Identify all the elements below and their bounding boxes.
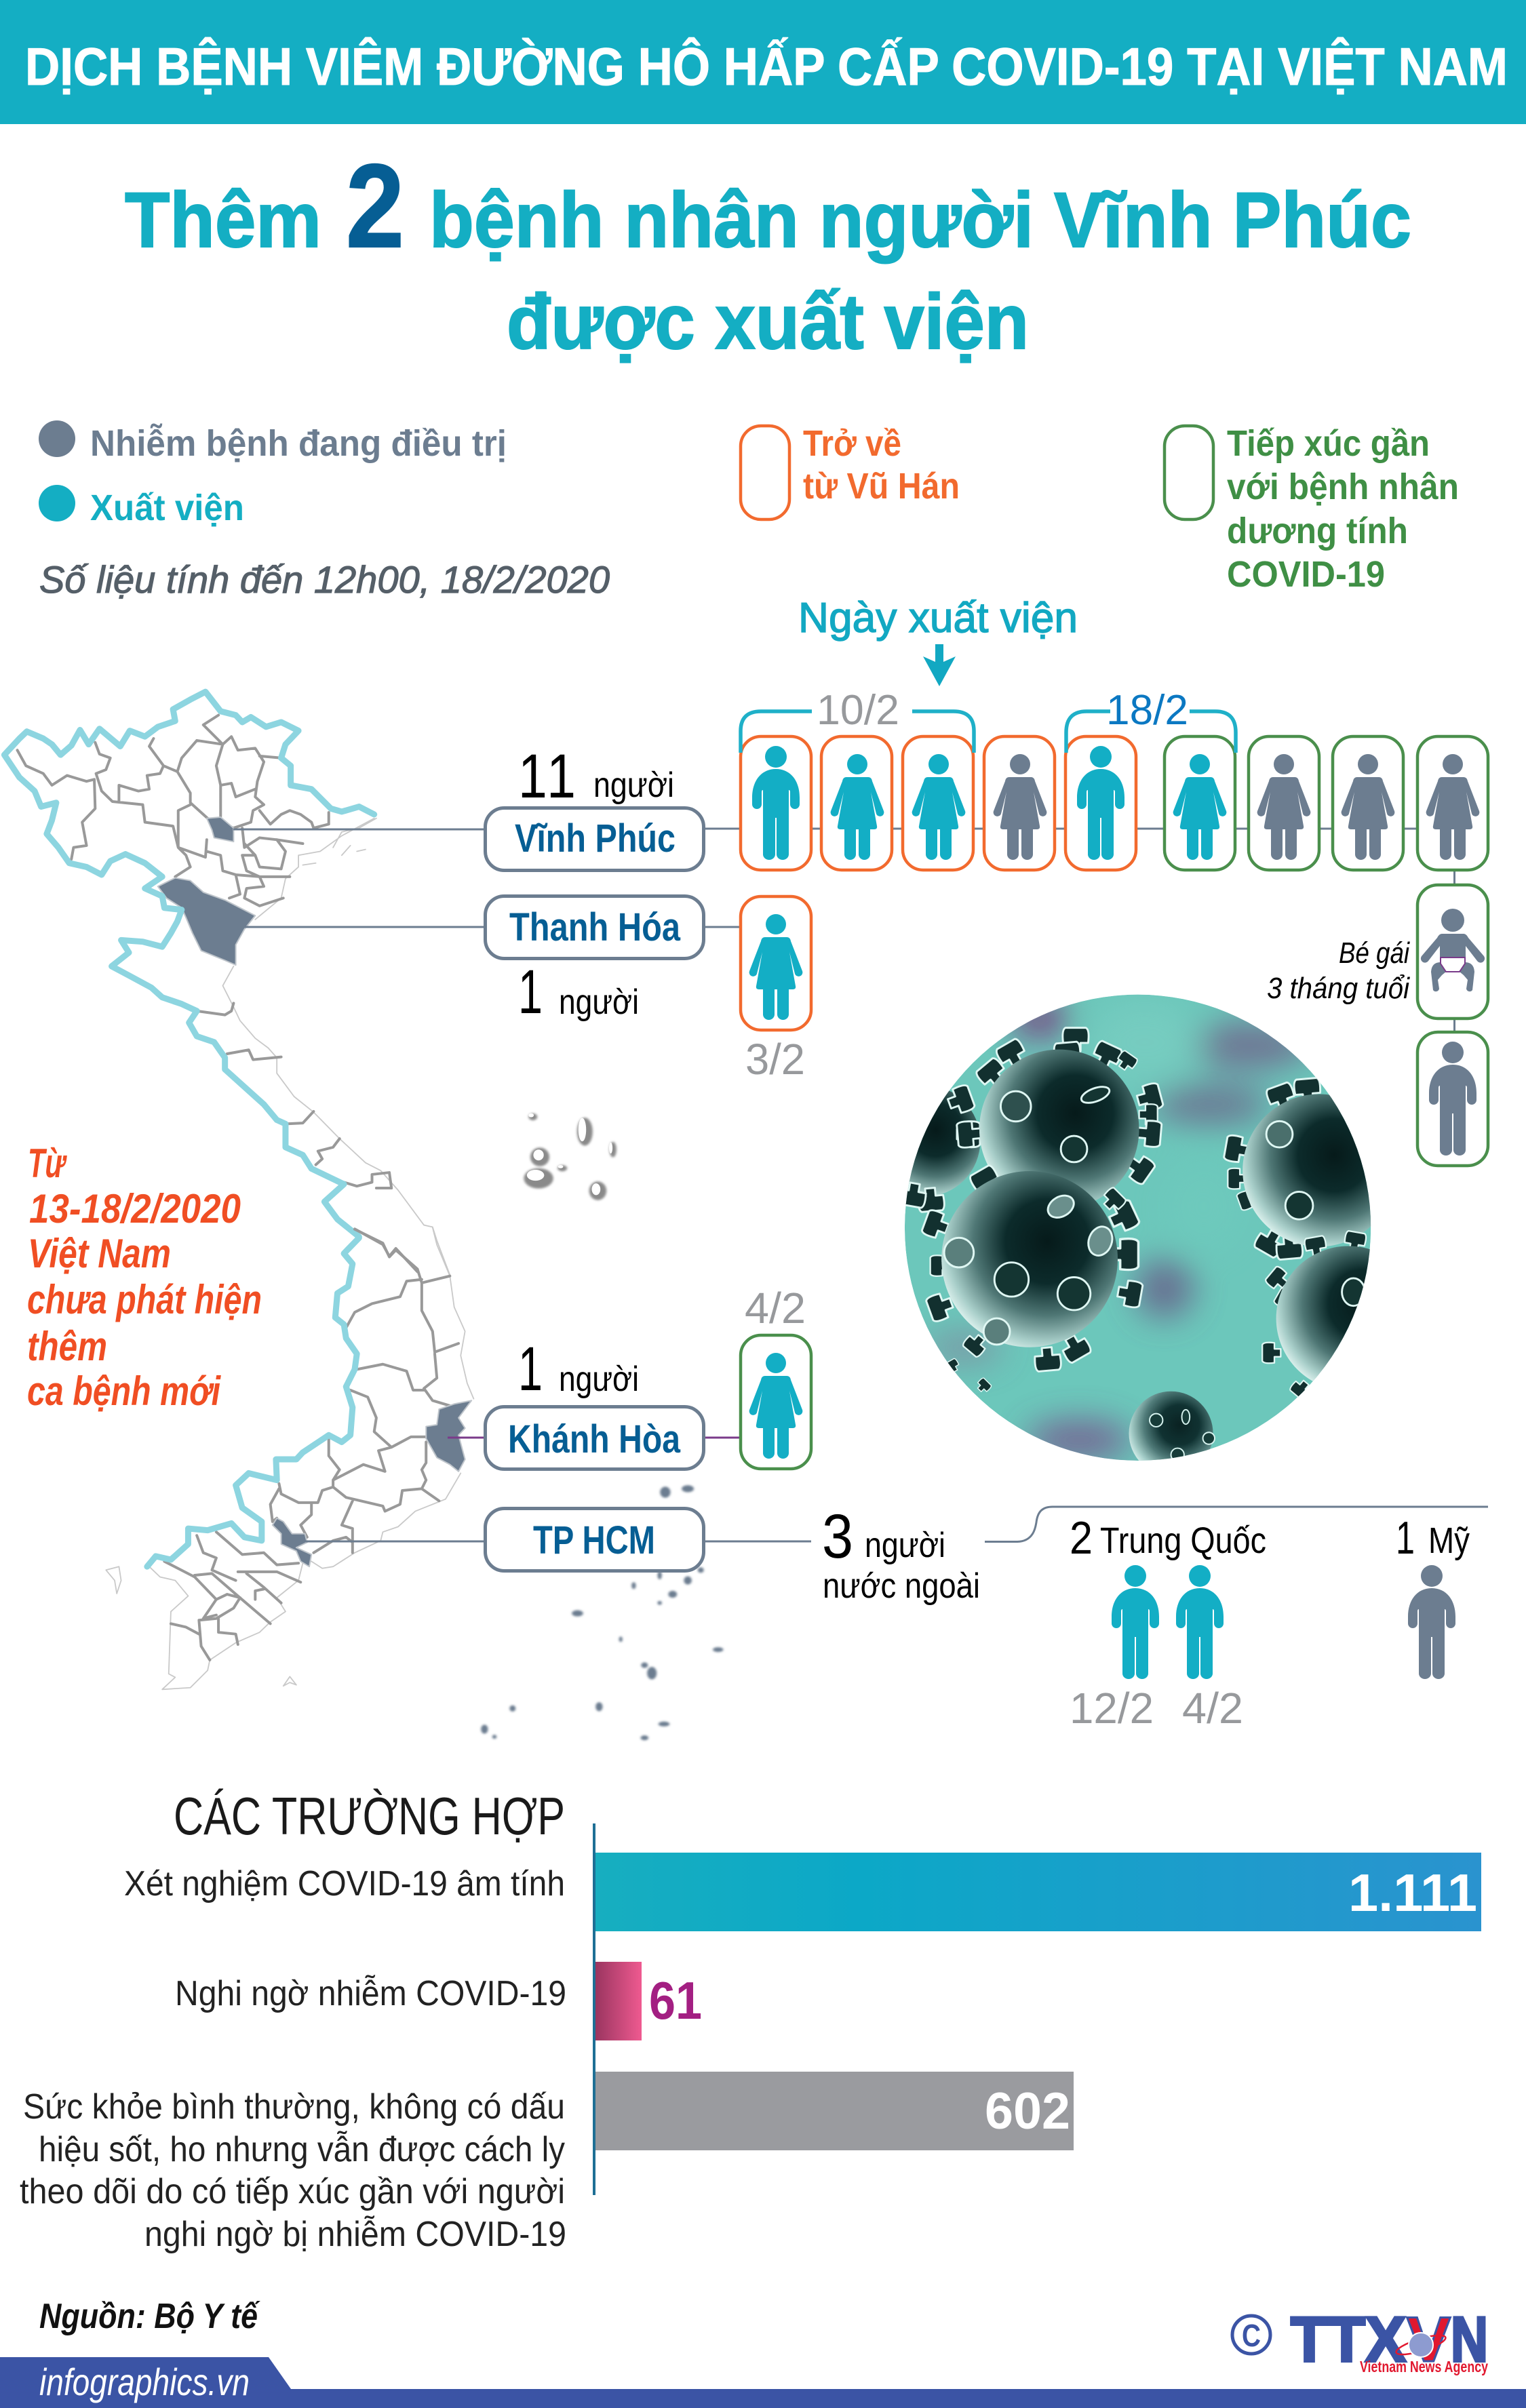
- map of Vietnam: [4, 692, 723, 1740]
- label: monitored: theo dõi do có tiếp xúc gần với người: [20, 2172, 565, 2211]
- map south: [106, 1227, 473, 1689]
- map: Khanh Hoa province: [426, 1400, 471, 1472]
- logo: TTXVN: V: [1407, 2304, 1451, 2375]
- virus particle: lower left: [921, 1164, 1143, 1372]
- legend: close contact: [1165, 423, 1459, 595]
- callout: no new cases: ca bệnh mới: [27, 1368, 221, 1414]
- Khanh Hoa count: [518, 1335, 639, 1404]
- icon: female, in treatment: [1426, 754, 1479, 860]
- map: Ho Chi Minh City: [273, 1518, 311, 1566]
- label: monitored: nghi ngờ bị nhiễm COVID-19: [144, 2215, 566, 2254]
- dates 12/2 and 4/2: 4/2: [1182, 1684, 1243, 1733]
- legend: status: Nhiễm bệnh đang điều trị: [90, 423, 507, 464]
- legend: status: Xuất viện: [90, 488, 244, 528]
- bar: negative tests: [595, 1853, 1481, 1931]
- foreigners count: người: [865, 1526, 945, 1565]
- pill: TP HCM: TP HCM: [533, 1518, 655, 1562]
- legend: close contact: Tiếp xúc gần: [1227, 423, 1430, 464]
- pill: Khanh Hoa: Khánh Hòa: [508, 1417, 681, 1461]
- icon: male, in treatment: [1429, 1042, 1476, 1156]
- bracket: discharged 10/2: 10/2: [817, 687, 899, 734]
- virus particle: lower left corner: [947, 1358, 992, 1392]
- card: Thanh Hoa patient: [741, 896, 811, 1030]
- label: monitored: hiệu sốt, ho nhưng vẫn được cách ly: [39, 2130, 565, 2169]
- China count: Trung Quốc: [1100, 1520, 1266, 1561]
- footer band: infographics.vn: [39, 2361, 250, 2403]
- header band: [0, 0, 1526, 124]
- icon: female, discharged: [1173, 754, 1226, 860]
- bar: monitored: [595, 2072, 1074, 2150]
- source: Nguồn: Bộ Y tế: [39, 2297, 260, 2336]
- icon: female, in treatment: [1342, 754, 1394, 860]
- bar: monitored: 602: [985, 2083, 1070, 2140]
- Hoang Sa islands: [524, 1113, 617, 1200]
- logo: TTXVN: TTX: [1291, 2304, 1406, 2375]
- foreigners count: nước ngoài: [823, 1566, 980, 1606]
- chart heading: CÁC TRƯỜNG HỢP: [174, 1786, 565, 1846]
- logo: TTXVN: N: [1451, 2304, 1488, 2375]
- virus particle: right upper: [1224, 1078, 1395, 1260]
- bar: suspected: [595, 1962, 702, 2040]
- card: Khanh Hoa patient: [741, 1335, 811, 1469]
- icon: female, in treatment: [994, 754, 1046, 860]
- China count: [1070, 1512, 1266, 1564]
- arrow: [923, 644, 956, 686]
- Truong Sa islands: [481, 1485, 723, 1740]
- Vinh Phuc count: 11: [518, 742, 579, 811]
- legend: status: [39, 420, 507, 528]
- callout: no new cases: Từ: [28, 1141, 67, 1186]
- label: negative tests: Xét nghiệm COVID-19 âm tính: [124, 1864, 565, 1903]
- label: suspected: Nghi ngờ nhiễm COVID-19: [175, 1974, 566, 2013]
- foreigners count: [822, 1502, 980, 1606]
- legend: returned from Wuhan: [741, 423, 960, 519]
- icon: female, discharged: [831, 754, 884, 860]
- map: west border south: [147, 1238, 359, 1566]
- Khanh Hoa count: người: [559, 1360, 639, 1399]
- Thanh Hoa count: 1: [518, 958, 543, 1027]
- dates 12/2 and 4/2: [1070, 1684, 1243, 1733]
- title: [125, 140, 1411, 366]
- virus particle: far left: [906, 1084, 981, 1213]
- Khanh Hoa count: 1: [518, 1335, 543, 1404]
- bracket: discharged 10/2: [741, 687, 974, 753]
- bar chart: [593, 1823, 1481, 2195]
- baby caption: 3 tháng tuổi: [1267, 972, 1410, 1005]
- map north and central: [4, 692, 450, 1275]
- callout: no new cases: chưa phát hiện: [27, 1277, 262, 1322]
- pill: Thanh Hoa: Thanh Hóa: [509, 905, 681, 949]
- bar: suspected: 61: [649, 1971, 702, 2030]
- bracket: discharged 18/2: 18/2: [1106, 687, 1188, 734]
- icon: male, American patient: [1408, 1565, 1455, 1679]
- footer band: [0, 2357, 1526, 2408]
- Thanh Hoa count: người: [559, 983, 639, 1022]
- label: monitored: [20, 2087, 566, 2254]
- legend: close contact: COVID-19: [1227, 554, 1385, 595]
- legend: close contact: dương tính: [1227, 511, 1408, 551]
- date 3/2: 3/2: [745, 1035, 805, 1084]
- legend: returned from Wuhan: Trở về: [803, 423, 901, 464]
- title: bệnh nhân người Vĩnh Phúc: [429, 177, 1411, 264]
- virus particle: bottom small: [1129, 1391, 1215, 1461]
- icon: male, discharged: [752, 746, 800, 860]
- map: Thanh Hoa province: [158, 878, 255, 965]
- Thanh Hoa count: [518, 958, 639, 1027]
- title: 2: [346, 140, 404, 273]
- copyright mark: C: [1242, 2318, 1261, 2353]
- label: monitored: Sức khỏe bình thường, không có dấu: [23, 2087, 565, 2127]
- dates 12/2 and 4/2: 12/2: [1070, 1684, 1154, 1733]
- Vinh Phuc count: [518, 742, 674, 811]
- icon: female, discharged: [912, 754, 965, 860]
- legend: returned from Wuhan: từ Vũ Hán: [803, 466, 960, 507]
- map: west border north: [4, 692, 374, 1237]
- callout: no new cases: 13-18/2/2020: [29, 1186, 241, 1231]
- callout: no new cases: thêm: [27, 1324, 107, 1369]
- logo: TTXVN: Vietnam News Agency: [1360, 2358, 1488, 2375]
- logo: TTXVN: [1291, 2304, 1488, 2375]
- USA count: [1396, 1512, 1470, 1564]
- date 4/2: 4/2: [745, 1284, 806, 1333]
- baby caption: Bé gái: [1339, 936, 1410, 970]
- icon: male, Chinese patient: [1112, 1565, 1159, 1679]
- legend: close contact: với bệnh nhân: [1227, 467, 1459, 507]
- data date note: Số liệu tính đến 12h00, 18/2/2020: [39, 558, 610, 601]
- USA count: 1: [1396, 1512, 1415, 1564]
- connector lines: [233, 829, 1488, 1542]
- foreigners count: 3: [822, 1502, 853, 1571]
- title: được xuất viện: [507, 279, 1029, 366]
- China count: 2: [1070, 1512, 1093, 1564]
- pill: Khanh Hoa: [486, 1406, 704, 1469]
- bracket: discharged 18/2: [1066, 687, 1236, 753]
- pill: Thanh Hoa: [486, 896, 704, 959]
- bar: negative tests: 1.111: [1348, 1863, 1477, 1922]
- icon: female, in treatment: [1257, 754, 1310, 860]
- Vinh Phuc patient cards: [741, 736, 1488, 1166]
- copyright mark: [1232, 2316, 1270, 2354]
- icon: baby girl: [1421, 909, 1485, 991]
- discharge date heading: Ngày xuất viện: [798, 595, 1078, 642]
- pill: TP HCM: [486, 1508, 704, 1571]
- callout: no new cases: [27, 1141, 262, 1414]
- icon: male, Chinese patient: [1176, 1565, 1224, 1679]
- virus particle: upper: [956, 1028, 1164, 1209]
- virus photo: [905, 994, 1371, 1461]
- callout: no new cases: Việt Nam: [28, 1231, 171, 1276]
- map: Vinh Phuc province: [207, 817, 233, 842]
- pill: Vinh Phuc: Vĩnh Phúc: [515, 816, 676, 861]
- USA count: Mỹ: [1428, 1520, 1470, 1561]
- icon: male, discharged: [1077, 746, 1124, 860]
- pill: Vinh Phuc: [486, 808, 704, 871]
- virus particle: right lower: [1261, 1230, 1370, 1397]
- title: Thêm: [125, 177, 321, 264]
- Vinh Phuc count: người: [593, 766, 674, 805]
- baby caption: [1267, 936, 1410, 1005]
